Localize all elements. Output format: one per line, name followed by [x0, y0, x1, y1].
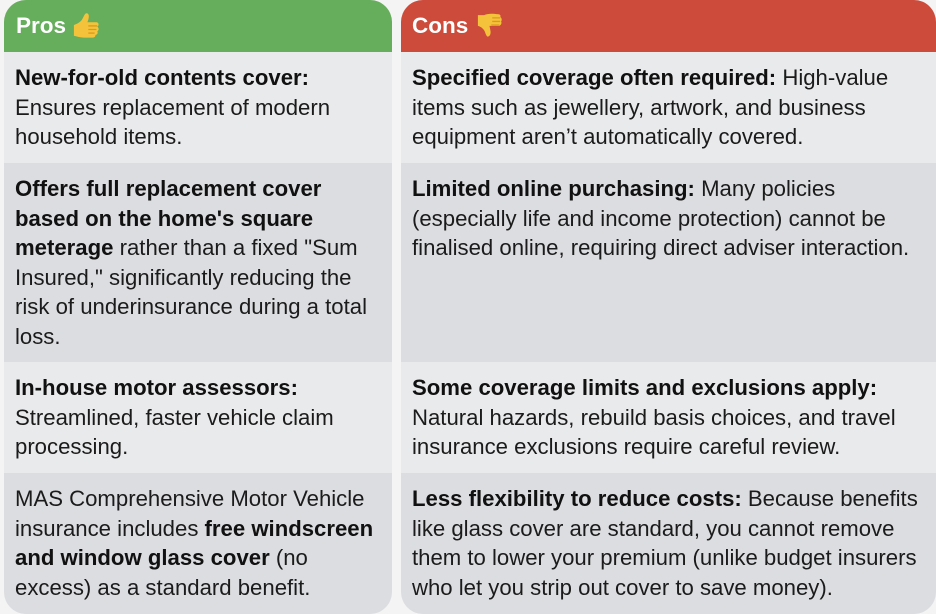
cons row 2: (especially life and income protection) cannot be	[412, 206, 886, 230]
pros row 3: In-house motor assessors:	[15, 375, 298, 400]
panel: pros	[4, 0, 392, 614]
cons row 2	[401, 163, 936, 362]
pros row 2: loss.	[15, 324, 61, 348]
pros row 1	[4, 52, 392, 163]
cons row 3: insurance exclusions require careful review.	[412, 434, 840, 459]
cons row 4: them to lower your premium (unlike budget insurers	[412, 545, 917, 570]
cons row 1	[401, 52, 936, 163]
pros row 2: meterage rather than a fixed "Sum	[15, 235, 358, 260]
pros row 1: New-for-old contents cover:	[15, 65, 309, 90]
pros header	[4, 0, 392, 52]
cons row 4: like glass cover are standard, you cannot remove	[412, 516, 894, 540]
pros row 2: risk of underinsurance during a total	[15, 294, 367, 319]
cons row 2: Limited online purchasing: Many policies	[412, 176, 835, 201]
pros row 2	[4, 163, 392, 362]
pros row 2: Offers full replacement cover	[15, 176, 321, 201]
pros header: Pros	[16, 13, 66, 38]
cons row 4: Less flexibility to reduce costs: Because benefits	[412, 486, 918, 511]
cons header	[401, 0, 936, 52]
cons row 1: items such as jewellery, artwork, and business	[412, 94, 866, 120]
pros row 3: processing.	[15, 434, 128, 459]
pros row 1: household items.	[15, 124, 182, 149]
panel: cons	[401, 0, 936, 614]
cons row 3: Some coverage limits and exclusions apply:	[412, 375, 877, 400]
cons row 2: finalised online, requiring direct adviser interaction.	[412, 235, 909, 260]
cons row 4	[401, 473, 936, 614]
pros row 4: insurance includes free windscreen	[15, 516, 373, 540]
cons header: Cons	[412, 13, 468, 38]
pros row 3	[4, 362, 392, 473]
pros row 4: excess) as a standard benefit.	[15, 574, 310, 600]
pros row 4	[4, 473, 392, 614]
cons row 1: equipment aren’t automatically covered.	[412, 124, 803, 149]
cons row 4: who let you strip out cover to save money).	[412, 574, 833, 600]
pros row 4: MAS Comprehensive Motor Vehicle	[15, 486, 364, 511]
icon: thumbs down	[478, 14, 502, 37]
pros row 4: and window glass cover (no	[15, 545, 308, 570]
cons row 1: Specified coverage often required: High-value	[412, 65, 888, 90]
cons row 3: Natural hazards, rebuild basis choices, and travel	[412, 404, 896, 430]
pros row 2: Insured," significantly reducing the	[15, 264, 351, 290]
pros row 3: Streamlined, faster vehicle claim	[15, 404, 334, 430]
pros row 1: Ensures replacement of modern	[15, 94, 330, 120]
icon: thumbs up	[74, 13, 99, 38]
cons row 3	[401, 362, 936, 473]
pros row 2: based on the home's square	[15, 206, 313, 230]
